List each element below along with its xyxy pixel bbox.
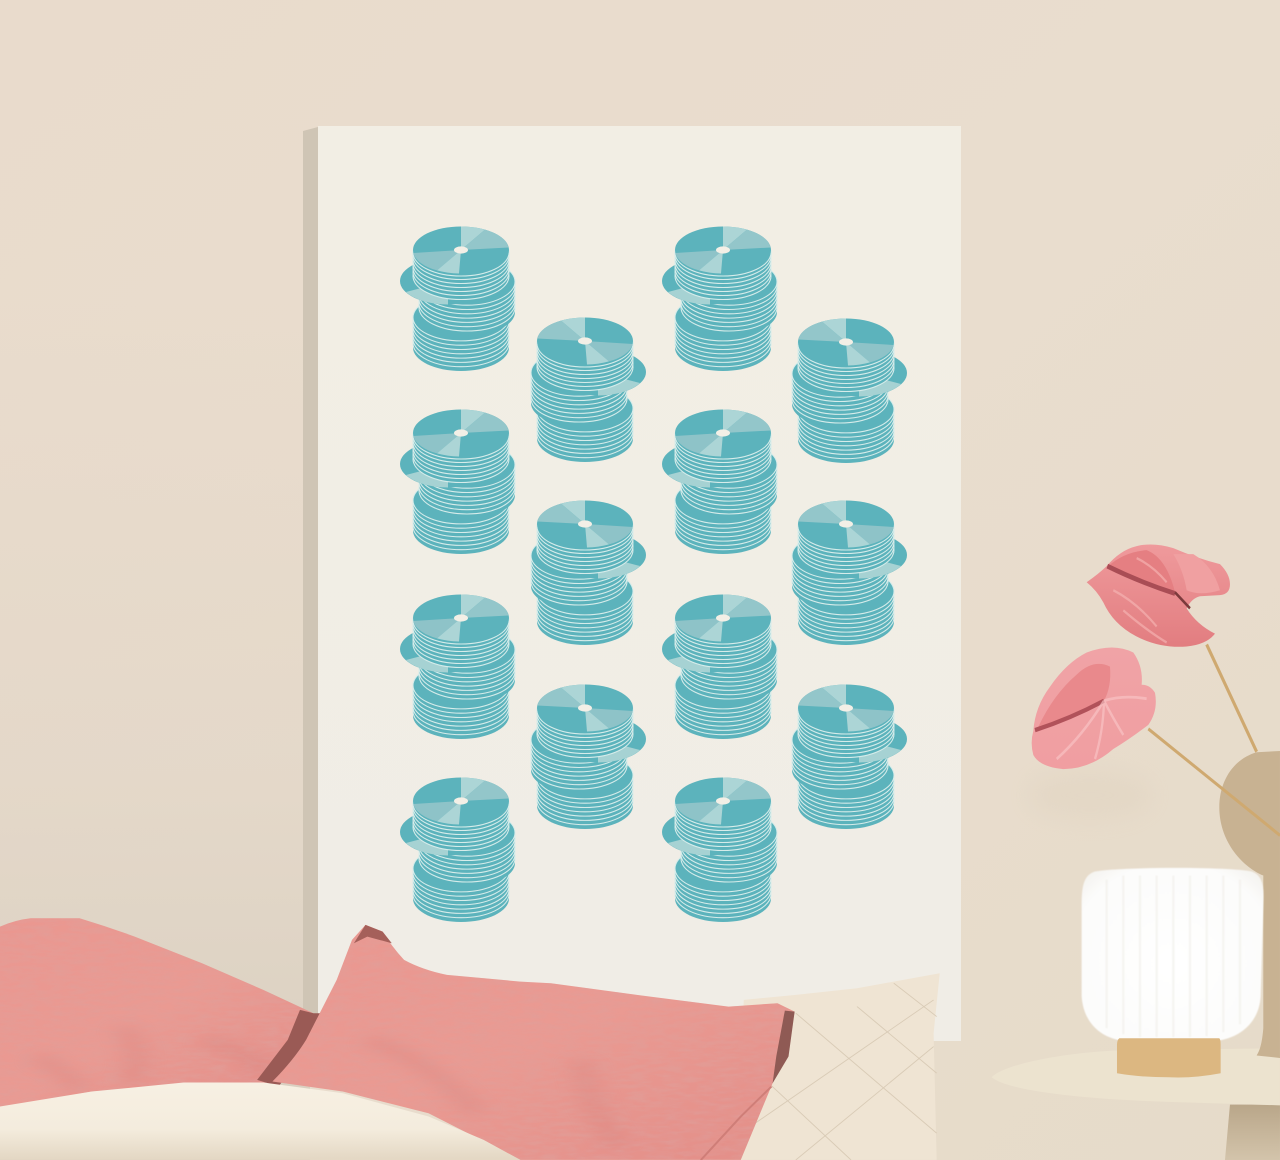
decor group: flowers, vase, lamp, table [992, 544, 1280, 1160]
pillow: knit cream front [0, 1083, 520, 1160]
stack: column 1 row 2 [400, 409, 515, 554]
stack: column 4 row 3 [792, 684, 907, 829]
stack: column 1 row 3 [400, 594, 515, 739]
table top [992, 1048, 1280, 1105]
lamp shade [1082, 868, 1263, 1041]
wall shading left [0, 300, 310, 1160]
poster sheet [318, 126, 961, 1041]
flower: upper anthurium [1087, 544, 1230, 647]
stem: upper flower [1207, 645, 1257, 752]
stack: column 1 row 4 [400, 777, 515, 922]
pillow: pink centre [272, 925, 795, 1160]
stack: column 3 row 2 [662, 409, 777, 554]
stem: lower flower [1148, 729, 1280, 835]
pillow: cream diamond quilted [735, 973, 940, 1160]
flower shadow on wall [1027, 771, 1153, 819]
table leg [1225, 1105, 1280, 1160]
disc stacks artwork [400, 226, 907, 922]
stack: column 2 row 3 [531, 684, 646, 829]
stack: column 1 row 1 [400, 226, 515, 371]
stack: column 2 row 2 [531, 500, 646, 645]
poster side edge shadow [303, 127, 318, 1040]
stack: column 4 row 2 [792, 500, 907, 645]
lamp wooden base [1117, 1038, 1221, 1077]
pillow: pink left [0, 918, 334, 1108]
stack: column 3 row 4 [662, 777, 777, 922]
flower: lower anthurium [1032, 648, 1156, 769]
stack: column 3 row 3 [662, 594, 777, 739]
pillows group [0, 918, 940, 1160]
stack: column 3 row 1 [662, 226, 777, 371]
vase [1219, 751, 1280, 1058]
stack: column 2 row 1 [531, 317, 646, 462]
stack: column 4 row 1 [792, 318, 907, 463]
